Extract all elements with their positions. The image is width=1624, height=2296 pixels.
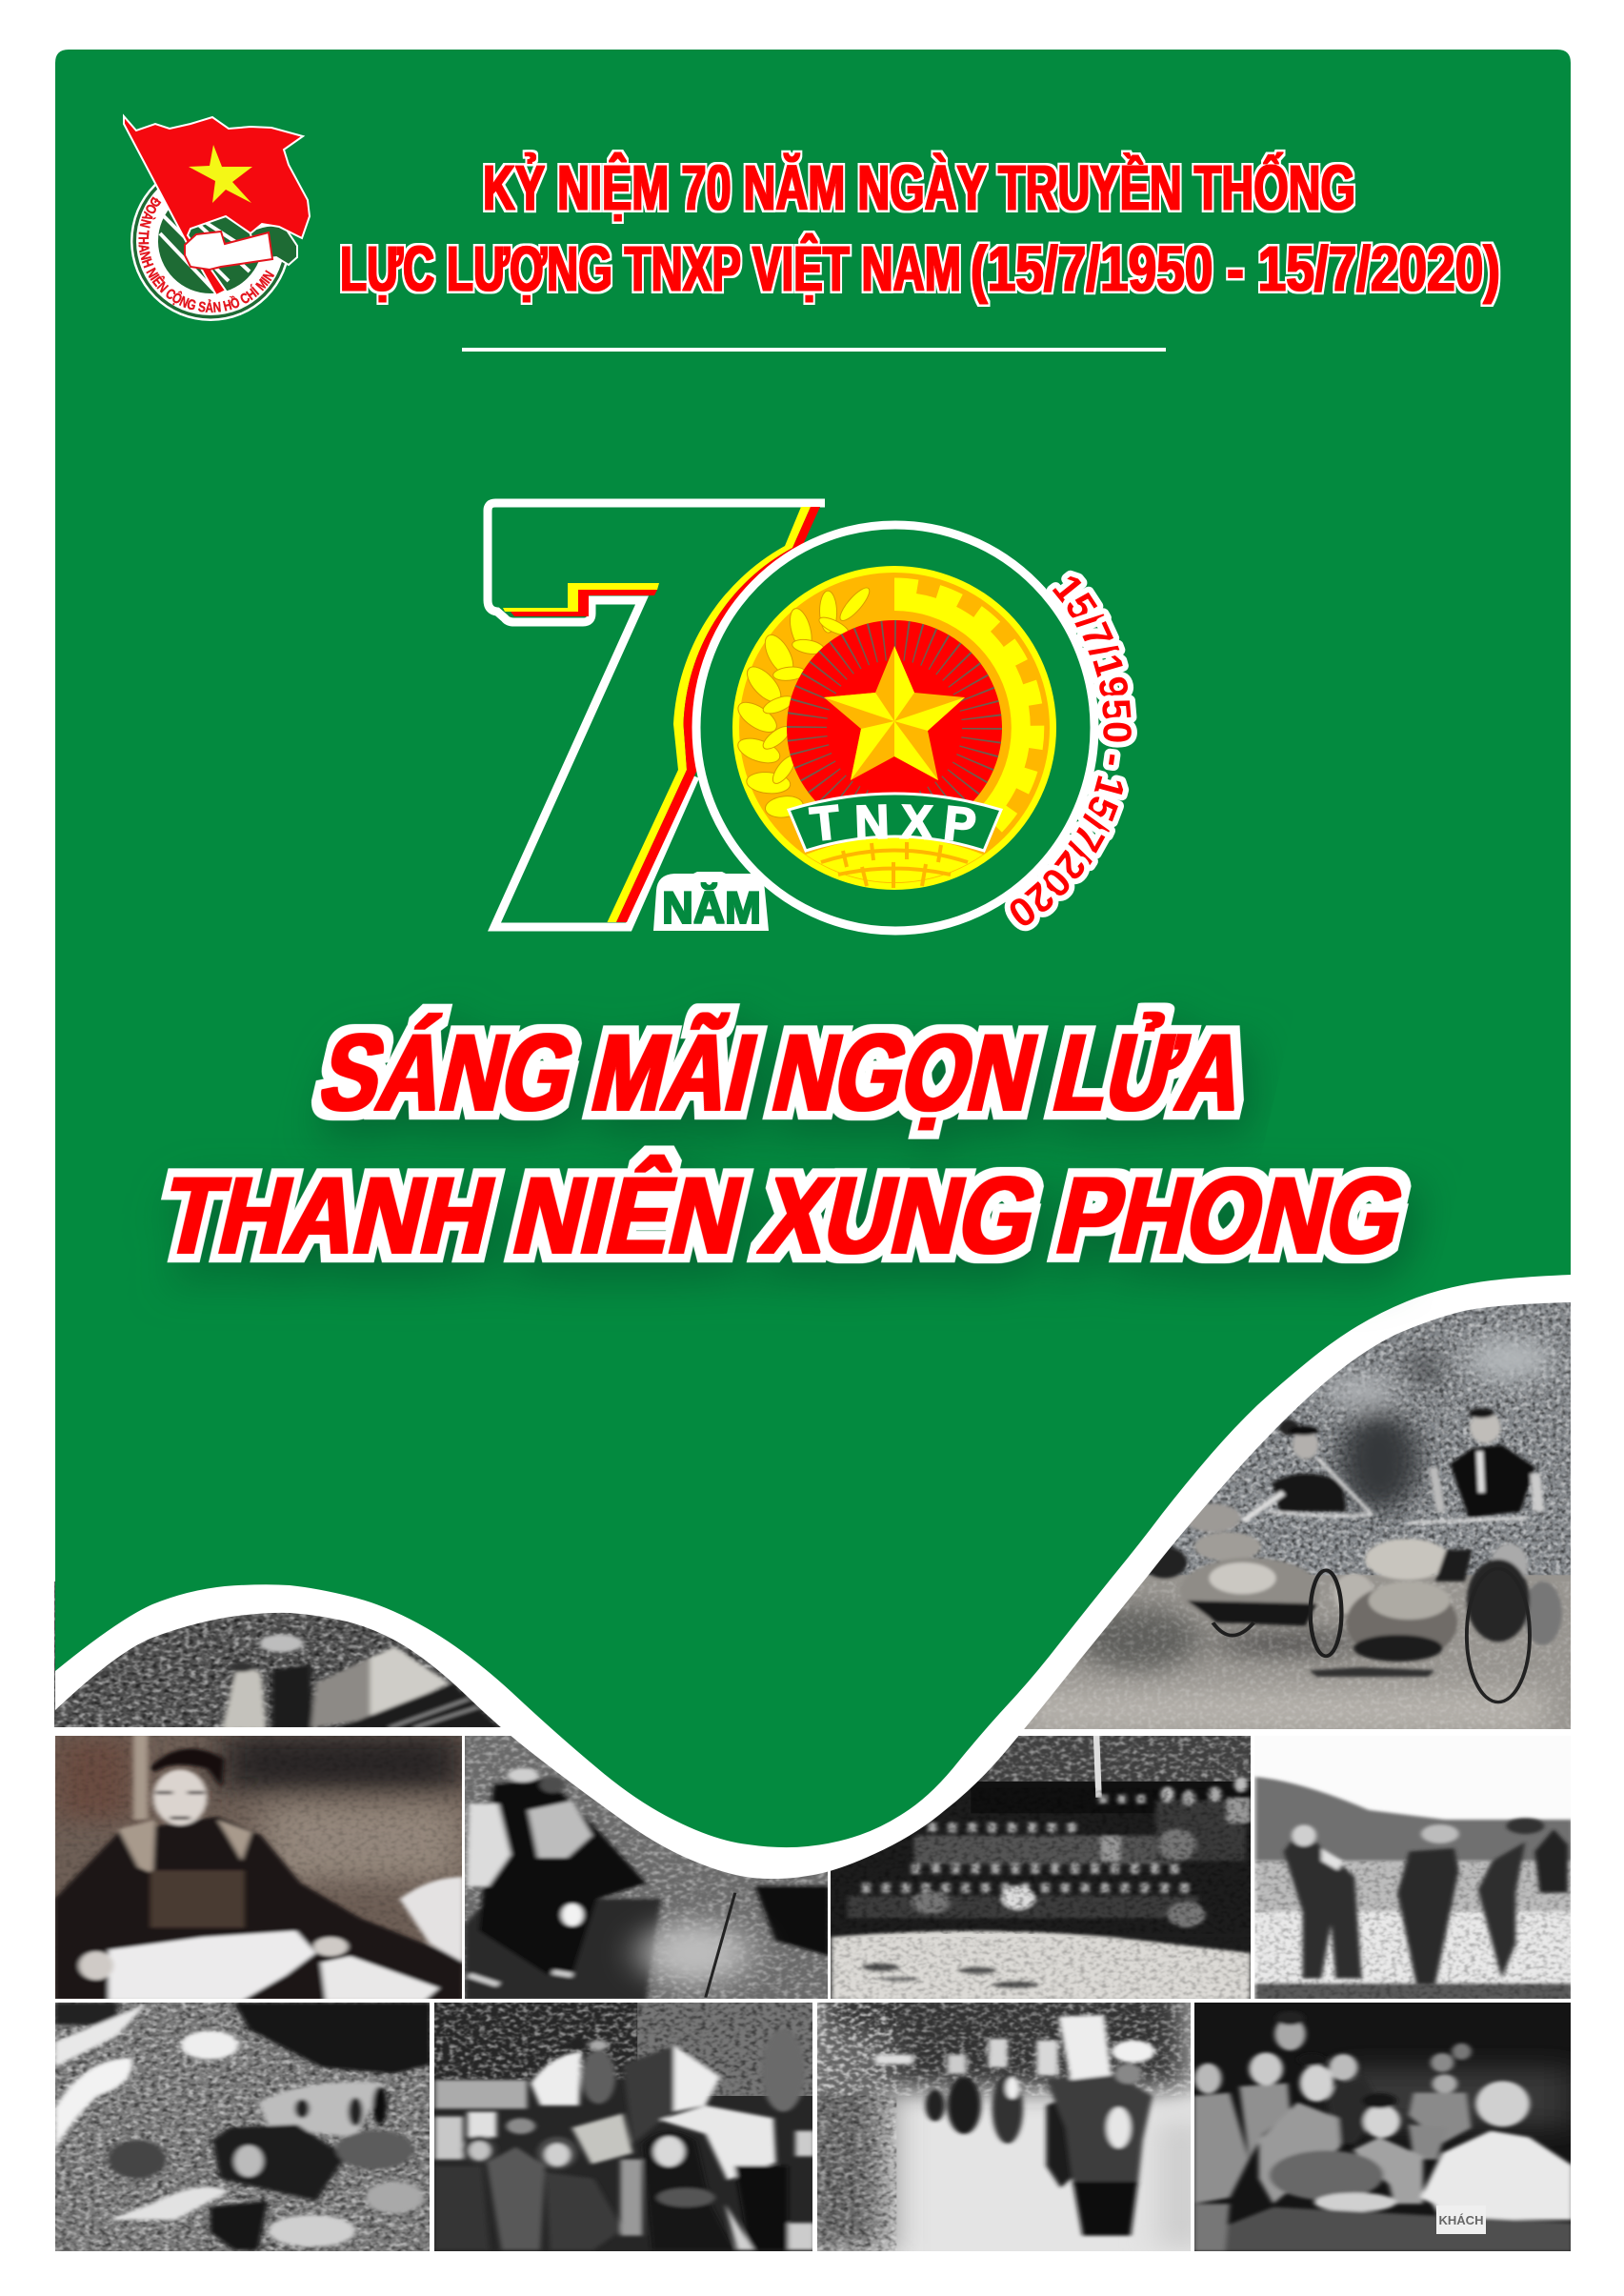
sub: name card bbox=[1436, 2205, 1486, 2234]
photo: workers digging with shovels bbox=[1253, 1734, 1575, 2001]
photo: volunteers wading through a river bbox=[795, 1982, 1201, 2251]
flag star bbox=[189, 145, 252, 203]
photo: volunteers on a jungle road bbox=[54, 2001, 431, 2251]
gear bbox=[894, 587, 1035, 843]
header text line 2: (15/7/1950 - 15/7/2020) bbox=[971, 233, 1500, 305]
main title line 1: SÁNG MÃI NGỌN LỬA bbox=[311, 1012, 1257, 1134]
banner label: P bbox=[941, 796, 978, 853]
header divider bbox=[462, 348, 1166, 352]
header logo: Youth Union emblem bbox=[123, 114, 311, 321]
red sunburst disc bbox=[787, 620, 1002, 836]
sleeve bbox=[250, 226, 297, 265]
curved stripes on 7 bbox=[608, 507, 811, 922]
numeral 7 outline bbox=[488, 503, 825, 927]
photo: Uncle Ho with young volunteers and a bouquet bbox=[1193, 2001, 1573, 2251]
flag bbox=[124, 116, 310, 295]
stripes on 7 step bbox=[503, 583, 659, 612]
raised fist bbox=[185, 232, 272, 270]
TNXP seal bbox=[731, 566, 1056, 890]
white wave band bbox=[55, 57, 1571, 1879]
photo: volunteers carrying boxes bbox=[433, 2001, 817, 2251]
banner label: T bbox=[808, 796, 842, 852]
sub: rider left bbox=[1243, 1420, 1373, 1521]
banner label: N bbox=[853, 795, 890, 850]
anniversary logo: 70 years bbox=[484, 499, 1137, 936]
photo: workers on a hillside (top left, under wave) bbox=[54, 1581, 513, 1731]
NĂM label: NĂM bbox=[662, 882, 761, 933]
green panel with wave edge bbox=[55, 50, 1571, 1847]
banner label bbox=[808, 795, 978, 853]
photo: large group portrait in front of huts bbox=[829, 1734, 1253, 2001]
bricks under banner bbox=[806, 836, 983, 888]
sub: name card: KHÁCH bbox=[1439, 2213, 1483, 2227]
photo: line of youth volunteers on a path bbox=[465, 1734, 830, 2001]
gold star bbox=[824, 646, 965, 780]
banner label: X bbox=[900, 795, 933, 850]
header text line 2: LỰC LƯỢNG TNXP VIỆT NAM bbox=[340, 233, 961, 305]
wheat ear bbox=[731, 582, 879, 834]
photo: portrait of a man with white parcels bbox=[54, 1734, 464, 2001]
photo: bicycle transport with loaded sacks (top right) bbox=[991, 1296, 1573, 1734]
TNXP banner bbox=[789, 794, 1001, 851]
sub: rider right bbox=[1410, 1408, 1539, 1522]
numeral 0 ring bbox=[696, 525, 1094, 931]
curved date text: 15/7/1950 - 15/7/2020 bbox=[1004, 570, 1137, 932]
main title line 2: THANH NIÊN XUNG PHONG bbox=[151, 1155, 1416, 1277]
